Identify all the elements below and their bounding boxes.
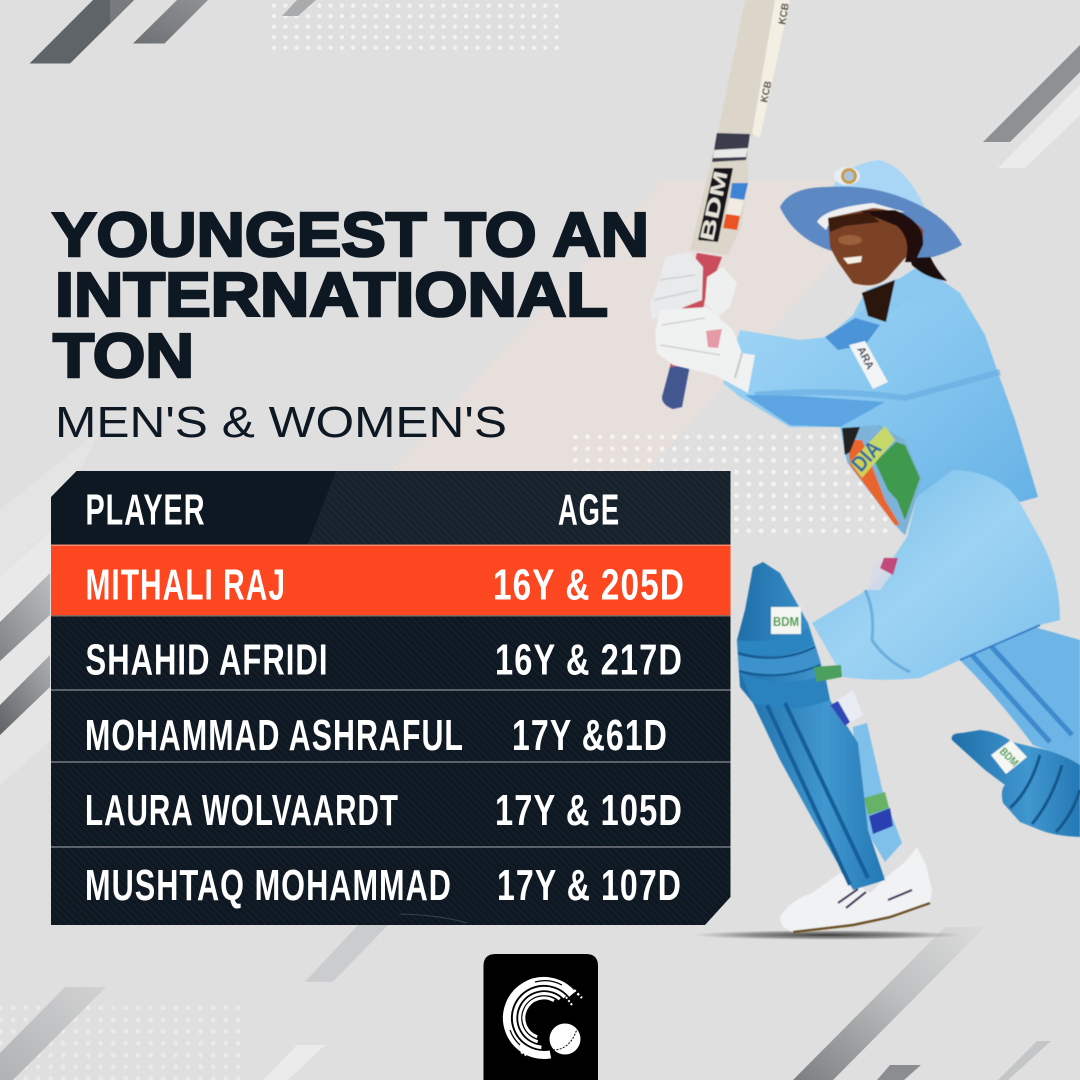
logo: cricket ball — [547, 1021, 583, 1057]
hat — [780, 160, 962, 258]
shoe — [780, 847, 932, 932]
row: Mithali Raj highlighted: 16Y & 205D — [493, 560, 685, 610]
row: Mohammad Ashraful: 17Y &61D — [512, 711, 668, 760]
back pad — [952, 730, 1080, 837]
title: TON — [53, 322, 194, 391]
dot grid: top — [270, 0, 561, 53]
row: Mithali Raj highlighted: MITHALI RAJ — [86, 560, 286, 610]
front pad — [737, 562, 885, 890]
bat sticker and BDM logo — [695, 133, 750, 243]
panel: ranking table — [51, 471, 730, 925]
dot grid: centre right — [571, 431, 890, 536]
ground shadow — [692, 930, 962, 940]
title: YOUNGEST TO AN — [52, 201, 649, 270]
jersey print: DIA — [847, 437, 887, 477]
row: Mohammad Ashraful: MOHAMMAD ASHRAFUL — [85, 711, 464, 760]
header row: AGE — [558, 486, 620, 534]
face — [817, 203, 923, 285]
row: Shahid Afridi: 16Y & 217D — [495, 636, 683, 684]
jersey print — [842, 425, 922, 535]
trousers — [812, 470, 1060, 680]
lower leg — [853, 723, 902, 862]
row dividers — [51, 689, 730, 848]
back leg — [960, 620, 1080, 770]
subtitle: MEN'S & WOMEN'S — [55, 398, 507, 447]
title — [52, 201, 649, 391]
sleeve sponsor patch: ARA — [854, 345, 876, 372]
logo: swoosh C — [507, 981, 582, 1056]
back pad: BDM — [997, 746, 1020, 769]
dot grid: bottom left — [0, 1002, 244, 1080]
header row: PLAYER — [86, 486, 206, 534]
table texture — [51, 471, 730, 925]
bat handle — [662, 253, 722, 409]
bat blade — [690, 0, 792, 255]
row: Mithali Raj highlighted — [51, 544, 730, 616]
bat blade: KCB — [759, 80, 774, 104]
bat sticker and BDM logo: BDM — [695, 169, 732, 243]
row: Mushtaq Mohammad: MUSHTAQ MOHAMMAD — [85, 861, 452, 910]
table background — [51, 471, 730, 925]
trouser logo — [867, 558, 898, 590]
bat blade: KCB — [777, 2, 792, 26]
header row — [86, 486, 620, 534]
shirt and sleeve — [723, 265, 1038, 535]
front pad: BDM — [773, 614, 799, 629]
row: Shahid Afridi: SHAHID AFRIDI — [86, 636, 328, 684]
row: Mushtaq Mohammad: 17Y & 107D — [497, 861, 682, 910]
title: INTERNATIONAL — [55, 261, 608, 330]
gloves — [650, 252, 755, 393]
row: Shahid Afridi — [86, 636, 683, 684]
logo badge — [484, 954, 598, 1080]
panel: pink diagonal backdrop — [391, 180, 905, 570]
neck — [862, 280, 895, 322]
row: Laura Wolvaardt: LAURA WOLVAARDT — [85, 786, 399, 835]
illustration: batter — [650, 0, 1080, 932]
sleeve sponsor patch — [849, 341, 888, 389]
ponytail — [905, 232, 947, 281]
row: Laura Wolvaardt: 17Y & 105D — [495, 786, 683, 835]
